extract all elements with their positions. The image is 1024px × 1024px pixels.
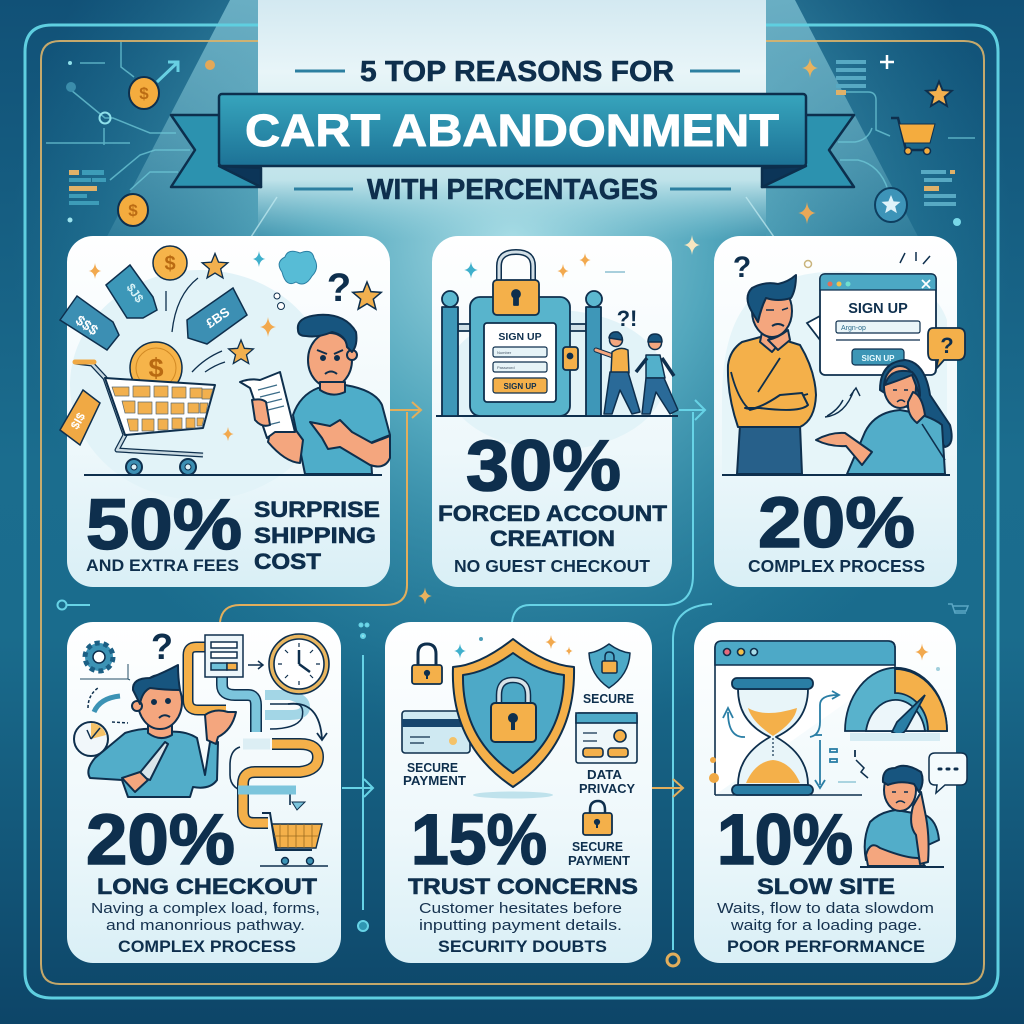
stat: 20%: 20%: [758, 484, 915, 563]
icon: data window: [576, 713, 637, 763]
banner ribbon: [171, 94, 854, 187]
window: sign up dialog: [807, 274, 936, 375]
panel: complex process: [714, 236, 965, 587]
icon: coin top left: $: [139, 84, 149, 103]
question mark: ?: [733, 251, 751, 284]
text: poor performance: POOR PERFORMANCE: [727, 937, 925, 956]
heading: surprise shipping cost: COST: [254, 549, 322, 574]
icon: coin: [153, 246, 187, 280]
heading: slow site: SLOW SITE: [757, 874, 895, 899]
icon: question bubble: [928, 328, 965, 369]
stat: 10%: 10%: [717, 801, 853, 880]
icon: coin: $: [164, 253, 176, 275]
question and exclamation marks: ?!: [617, 306, 637, 331]
labels: security features: PRIVACY: [579, 782, 636, 796]
text: description: Naving a complex load, forms,: [91, 900, 320, 917]
icon: speed gauge: [845, 668, 947, 741]
text: description: [717, 900, 934, 934]
stat: 50%: 50%: [86, 486, 242, 565]
labels: security features: SECURE: [407, 761, 458, 775]
text: description: inputting payment details.: [419, 917, 622, 934]
window: sign up dialog: SIGN UP: [848, 301, 908, 317]
icon: thought cloud and question mark: ?: [327, 266, 351, 310]
icon: two people at gate: [596, 332, 678, 414]
text: description: waitg for a loading page.: [730, 917, 922, 934]
header decorations left: [46, 42, 215, 226]
icon: question bubble: ?: [940, 333, 954, 358]
text: complex process: COMPLEX PROCESS: [118, 937, 296, 956]
icon: price tags: $$$: [73, 312, 101, 338]
labels: security features: DATA: [587, 768, 622, 782]
icon: hourglass: [732, 678, 813, 795]
connector arrows: [58, 400, 712, 966]
text: complex process: COMPLEX PROCESS: [748, 556, 925, 576]
stars and sparkles: [89, 251, 381, 441]
icon: small clock: [74, 722, 108, 756]
icon: checkout form: [205, 635, 263, 677]
subtitle bottom: WITH PERCENTAGES: [367, 174, 658, 206]
icon: star badge: [875, 188, 907, 222]
labels: security features: SECURE: [572, 840, 623, 854]
heading: long checkout: LONG CHECKOUT: [97, 874, 318, 899]
panel: trust concerns: [385, 622, 652, 963]
stat: 30%: 30%: [466, 427, 621, 506]
stat: 20%: 20%: [86, 801, 235, 880]
man thinking: [728, 275, 816, 474]
person waiting: [865, 766, 939, 866]
subtitle top: 5 TOP REASONS FOR: [360, 56, 674, 88]
person holding receipt: [240, 315, 390, 474]
icon: price tags: £BS: [203, 304, 233, 331]
woman worried: [816, 360, 952, 474]
small left node: [58, 600, 90, 610]
icon: price tags: $I$: [68, 410, 88, 432]
icon: coin lower left: $: [128, 201, 138, 220]
icon: gear: [80, 643, 130, 680]
icon: gate with lock and sign up form: Number: [497, 350, 512, 355]
icon: lower lock: [583, 801, 612, 835]
gold connector lower right: [652, 640, 683, 966]
panel: long checkout: [67, 622, 341, 963]
text: description: Customer hesitates before: [419, 900, 622, 917]
person with pen: [88, 665, 236, 797]
icon: price tags: $J$: [124, 281, 147, 305]
labels: security features: [403, 692, 636, 868]
icon: gate with lock and sign up form: SIGN UP: [498, 331, 542, 343]
banner ribbon: CART ABANDONMENT: [245, 105, 779, 156]
text: and extra fees: AND EXTRA FEES: [86, 556, 239, 575]
icon: small shield: [589, 644, 630, 688]
icon: coin top left: [129, 77, 159, 109]
icon: large shield: [453, 639, 574, 787]
heading: surprise shipping cost: SURPRISE: [254, 497, 380, 522]
icon: thought cloud and question mark: [274, 251, 351, 310]
flow arrows: [723, 691, 856, 788]
icon: browser window: [715, 641, 895, 795]
gold connector: [220, 402, 421, 622]
heading: forced account creation: FORCED ACCOUNT: [438, 501, 668, 526]
winding path: [188, 647, 327, 823]
icon: price tags: [60, 265, 247, 445]
heading: forced account creation: CREATION: [490, 526, 615, 551]
icon: gate with lock and sign up form: Password: [497, 365, 515, 370]
sparkles: [454, 635, 573, 658]
text: description: [91, 900, 320, 934]
text: description: Waits, flow to data slowdom: [717, 900, 934, 917]
title: [171, 56, 854, 206]
panel: forced account creation: [432, 236, 678, 587]
icon: star: [926, 82, 952, 106]
text: description: [419, 900, 622, 934]
stat: 15%: 15%: [411, 801, 547, 880]
question mark: ?: [151, 626, 173, 667]
icon: gate with lock and sign up form: [442, 252, 602, 416]
heading: forced account creation: [438, 501, 668, 551]
icon: speech bubble: [929, 753, 967, 793]
icon: shopping cart: [891, 118, 935, 154]
cyan connector: [512, 400, 712, 640]
panel: surprise shipping cost: [60, 236, 390, 587]
window: sign up dialog: Argn-op: [841, 325, 866, 332]
window: sign up dialog: SIGN UP: [862, 354, 895, 363]
heading: surprise shipping cost: SHIPPING: [254, 523, 376, 548]
icon: small cart: [260, 813, 328, 866]
icon: shopping cart with coin: $: [148, 353, 164, 383]
icon: gate with lock and sign up form: SIGN UP: [504, 382, 537, 391]
heading: trust concerns: TRUST CONCERNS: [408, 874, 638, 899]
cyan connector lower left: [342, 624, 373, 931]
sparkles: [464, 253, 625, 278]
icon: credit card: [402, 711, 470, 753]
icon: wall clock: [269, 634, 329, 694]
labels: security features: PAYMENT: [403, 774, 466, 788]
heading: surprise shipping cost: [254, 497, 380, 574]
icon: shopping cart with coin: [75, 342, 215, 475]
labels: security features: PAYMENT: [568, 854, 630, 868]
panel: slow site: [694, 622, 967, 963]
header decorations right: [798, 55, 975, 226]
icon: coin lower left: [118, 194, 148, 226]
icon: small lock: [412, 644, 442, 684]
text: no guest checkout: NO GUEST CHECKOUT: [454, 556, 650, 576]
text: description: and manonrious pathway.: [106, 917, 305, 934]
text: security doubts: SECURITY DOUBTS: [438, 937, 607, 956]
labels: security features: SECURE: [583, 692, 634, 706]
